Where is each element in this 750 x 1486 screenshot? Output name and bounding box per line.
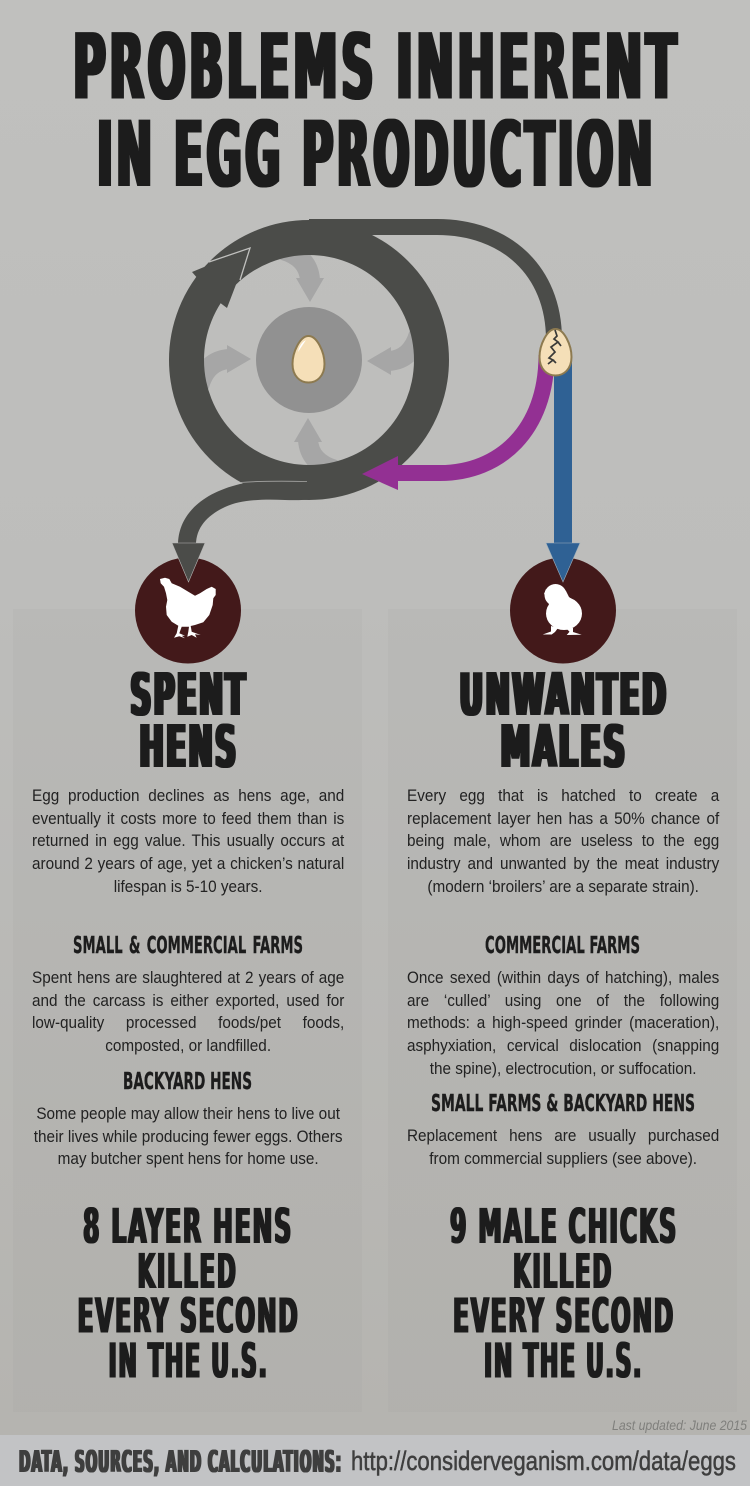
text: commercial farms: are ‘culled’ using one of the following: [407, 991, 719, 1010]
statistic: layer hens killed: [78, 1199, 300, 1390]
text: unwanted males intro: (modern ‘broilers’ are a separate strain).: [427, 877, 699, 896]
icon: four inward arrows: [199, 250, 419, 470]
panel: spent hens background: [13, 609, 362, 1412]
statistic: layer hens killed: 8 LAYER HENS: [83, 1199, 293, 1255]
text: backyard hens: [34, 1104, 343, 1168]
arrow: to spent hens: [178, 480, 380, 545]
stream from cracked egg into cycle: [309, 227, 554, 340]
statistic: male chicks killed: [450, 1199, 678, 1390]
heading: spent hens: [130, 660, 248, 781]
subheading: backyard hens: BACKYARD HENS: [123, 1069, 252, 1095]
panel: unwanted males background: [388, 609, 737, 1412]
text: commercial farms: [407, 968, 719, 1078]
text: spent hens intro: Egg production declines as hens age, and: [32, 786, 344, 805]
text: small and commercial farms: and the carcass is either exported, used for: [32, 991, 344, 1010]
icon: chick in circle: [510, 558, 616, 664]
text: unwanted males intro: [407, 786, 720, 896]
central grey circle: [256, 307, 362, 413]
text: EVERY SECOND: [78, 1289, 300, 1345]
subheading: small and commercial farms: SMALL & COMMERCIAL FARMS: [73, 933, 303, 959]
text: unwanted males intro: industry and unwanted by the meat industry: [407, 854, 719, 873]
arrow: blue to unwanted males: [546, 358, 580, 582]
text: spent hens intro: eventually it costs more to feed them than is: [32, 809, 344, 828]
text: small farms and backyard hens: from commercial suppliers (see above).: [429, 1149, 697, 1168]
text: unwanted males intro: replacement layer hen has a 50% chance of: [407, 809, 719, 828]
text: backyard hens: Some people may allow their hens to live out: [36, 1104, 340, 1123]
text: unwanted males intro: Every egg that is hatched to create a: [407, 786, 719, 805]
text: small and commercial farms: [32, 968, 344, 1055]
text: small farms and backyard hens: [407, 1126, 719, 1168]
statistic: layer hens killed: IN THE U.S.: [108, 1334, 268, 1390]
text: SPENT: [130, 660, 248, 729]
arrow: purple return to cycle: [362, 355, 546, 490]
text: spent hens intro: [32, 786, 344, 896]
text: small and commercial farms: Spent hens are slaughtered at 2 years of age: [32, 968, 344, 987]
icon: hen in circle: [135, 558, 241, 664]
statistic: male chicks killed: KILLED: [513, 1244, 613, 1300]
text: commercial farms: Once sexed (within days of hatching), males: [407, 968, 719, 987]
text: spent hens intro: lifespan is 5-10 years.: [114, 877, 263, 896]
text: unwanted males intro: being male, whom are useless to the egg: [407, 831, 719, 850]
subheading: commercial farms: COMMERCIAL FARMS: [485, 933, 640, 959]
circular production arrow: [186, 238, 432, 482]
production cycle diagram: [178, 227, 580, 582]
statistic: layer hens killed: KILLED: [138, 1244, 238, 1300]
text: small farms and backyard hens: Replacement hens are usually purchased: [407, 1126, 719, 1145]
icon: cracked egg: [540, 329, 572, 376]
text: spent hens intro: returned in egg value. This usually occurs at: [32, 831, 344, 850]
heading: spent hens: HENS: [140, 712, 238, 781]
heading: unwanted males: MALES: [500, 712, 628, 781]
text: small and commercial farms: low-quality processed foods/pet foods,: [32, 1013, 344, 1032]
title: [73, 15, 680, 208]
arrowhead outline: unwanted males: [546, 543, 580, 582]
heading: unwanted males: [460, 660, 668, 781]
text: commercial farms: the spine), electrocution, or suffocation.: [430, 1059, 697, 1078]
text: backyard hens: may butcher spent hens for home use.: [58, 1149, 319, 1168]
text: commercial farms: methods: a high-speed grinder (maceration),: [407, 1013, 719, 1032]
text: commercial farms: asphyxiation, cervical dislocation (snapping: [407, 1036, 719, 1055]
text: spent hens intro: around 2 years of age, yet a chicken’s natural: [32, 854, 344, 873]
text: small and commercial farms: composted, or landfilled.: [105, 1036, 271, 1055]
text: backyard hens: their lives while producing fewer eggs. Others: [34, 1127, 343, 1146]
footer band: [0, 1435, 750, 1486]
icon: egg: [292, 336, 324, 382]
text: DATA, SOURCES, AND CALCULATIONS:: [19, 1445, 342, 1480]
arrowhead: spent hens: [172, 543, 205, 582]
